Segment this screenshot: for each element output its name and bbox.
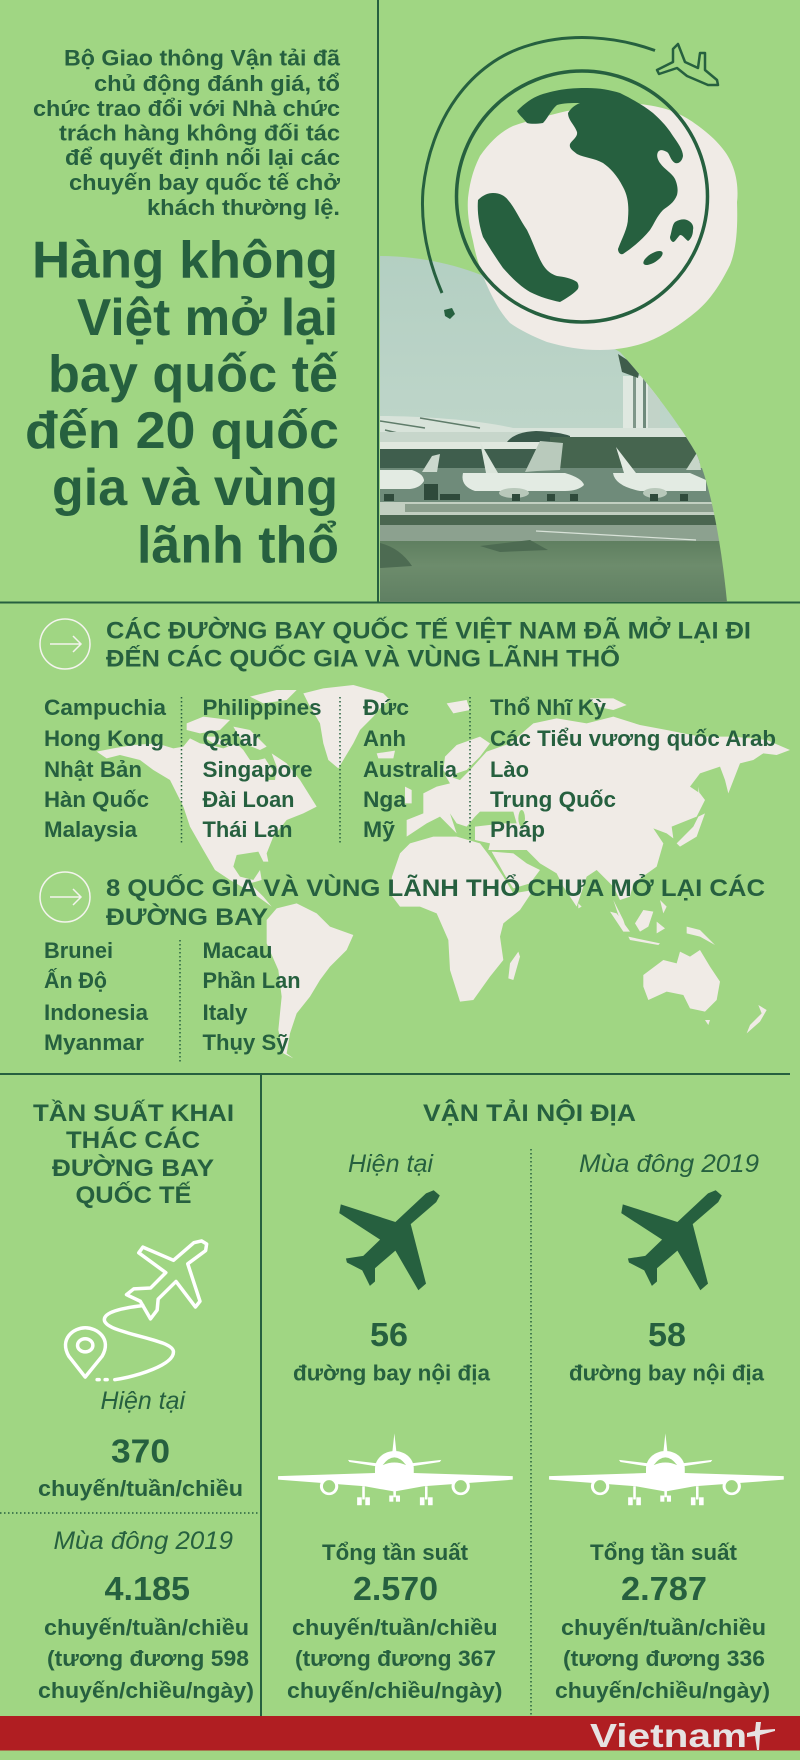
list: reopened countries: Thái Lan <box>202 817 292 842</box>
title: đến 20 quốc <box>25 402 339 460</box>
list: reopened countries: Philippines <box>202 695 322 720</box>
heading: reopened routes: ĐẾN CÁC QUỐC GIA VÀ VÙNG LÃNH THỔ <box>106 644 620 672</box>
list: not reopened countries: Ấn Độ <box>44 968 107 993</box>
title: bay quốc tế <box>48 346 338 404</box>
left: winter 2019 value <box>38 1527 254 1703</box>
left: winter 2019 value: chuyến/tuần/chiều <box>44 1615 249 1640</box>
heading: not reopened: ĐƯỜNG BAY <box>106 903 268 931</box>
orbit dot <box>444 308 455 319</box>
list: reopened countries: Hàn Quốc <box>44 787 149 812</box>
list: reopened countries: Malaysia <box>44 817 137 842</box>
heading: international frequency: ĐƯỜNG BAY <box>52 1154 214 1182</box>
domestic frequency: winter 2019: Tổng tần suất <box>590 1540 738 1565</box>
globe ring <box>456 71 708 322</box>
domestic frequency: current: Tổng tần suất <box>322 1540 469 1565</box>
logo: Vietnam+: Vietnam <box>590 1717 747 1754</box>
world map <box>97 685 790 1058</box>
list: reopened countries: Pháp <box>490 817 545 842</box>
list: reopened countries: Campuchia <box>44 695 166 720</box>
list: not reopened countries: Italy <box>202 1000 248 1025</box>
domestic frequency: winter 2019: chuyến/tuần/chiều <box>561 1615 766 1640</box>
intro text: khách thường lệ. <box>147 195 340 220</box>
list: reopened countries: Australia <box>363 757 457 782</box>
icon: small airplane outline <box>657 44 718 85</box>
domestic: winter 2019: Mùa đông 2019 <box>579 1150 759 1178</box>
intro text <box>33 46 340 220</box>
domestic frequency: winter 2019 <box>555 1540 770 1703</box>
list: reopened countries: Singapore <box>202 757 312 782</box>
title: Việt mở lại <box>77 289 338 347</box>
orbit arc <box>422 38 655 293</box>
intro text: Bộ Giao thông Vận tải đã <box>64 46 340 71</box>
left: current value: chuyến/tuần/chiều <box>38 1476 243 1501</box>
footer band <box>0 1716 800 1750</box>
list: not reopened countries: Macau <box>202 938 272 963</box>
heading: not reopened: 8 QUỐC GIA VÀ VÙNG LÃNH THỔ CHƯA MỞ LẠI CÁC <box>106 873 765 902</box>
heading: domestic transport: VẬN TẢI NỘI ĐỊA <box>423 1098 636 1127</box>
heading: reopened routes <box>106 616 751 672</box>
heading: international frequency: QUỐC TẾ <box>76 1181 192 1209</box>
list: not reopened countries <box>44 938 300 1055</box>
intro text: chức trao đổi với Nhà chức <box>33 96 340 121</box>
airport photo <box>380 250 730 603</box>
list: reopened countries: Lào <box>490 757 529 782</box>
domestic: current <box>293 1150 491 1386</box>
globe continents <box>478 88 693 302</box>
list: reopened countries: Nhật Bản <box>44 757 142 782</box>
domestic frequency: current: 2.570 <box>353 1570 438 1607</box>
list: reopened countries: Đức <box>363 695 409 720</box>
heading: not reopened <box>106 873 765 931</box>
left: winter 2019 value: (tương đương 598 <box>47 1646 249 1671</box>
list: reopened countries: Trung Quốc <box>490 787 616 812</box>
list: not reopened countries: Indonesia <box>44 1000 148 1025</box>
list: reopened countries <box>44 695 776 842</box>
domestic frequency: winter 2019: (tương đương 336 <box>563 1646 765 1671</box>
heading: international frequency: THÁC CÁC <box>66 1126 200 1154</box>
title: lãnh thổ <box>137 516 339 574</box>
heading: international frequency: TẦN SUẤT KHAI <box>33 1099 234 1127</box>
left: current value: Hiện tại <box>100 1387 186 1415</box>
domestic frequency: winter 2019: chuyến/chiều/ngày) <box>555 1678 770 1703</box>
icon: route with airplane and pin <box>66 1241 207 1380</box>
domestic frequency: winter 2019: 2.787 <box>621 1570 707 1607</box>
icon: white front plane 2 <box>549 1433 784 1505</box>
left: winter 2019 value: chuyến/chiều/ngày) <box>38 1678 254 1703</box>
intro text: trách hàng không đối tác <box>59 121 340 146</box>
domestic frequency: current <box>287 1540 502 1703</box>
list: reopened countries: Nga <box>363 787 406 812</box>
list: reopened countries: Mỹ <box>363 817 395 842</box>
title: gia và vùng <box>52 459 338 517</box>
left: current value <box>38 1387 243 1501</box>
left: current value: 370 <box>111 1432 170 1470</box>
planes <box>380 441 706 498</box>
domestic: winter 2019: đường bay nội địa <box>569 1360 765 1386</box>
icon: white front plane 1 <box>278 1433 513 1505</box>
logo: Vietnam+ <box>590 1717 775 1754</box>
title <box>25 232 339 574</box>
intro text: chủ động đánh giá, tổ <box>94 71 340 96</box>
globe blob <box>468 103 738 350</box>
list: not reopened countries: Phần Lan <box>202 968 300 993</box>
domestic frequency: current: (tương đương 367 <box>295 1646 496 1671</box>
list: not reopened countries: Brunei <box>44 938 113 963</box>
list: not reopened countries: Thụy Sỹ <box>202 1030 289 1055</box>
list: reopened countries: Anh <box>363 726 406 751</box>
intro text: chuyến bay quốc tế chở <box>69 170 340 195</box>
domestic: current: đường bay nội địa <box>293 1360 491 1386</box>
list: reopened countries: Thổ Nhĩ Kỳ <box>490 695 606 720</box>
intro text: để quyết định nối lại các <box>65 145 340 170</box>
list: not reopened countries: Myanmar <box>44 1030 144 1055</box>
left: winter 2019 value: 4.185 <box>104 1570 190 1607</box>
left: winter 2019 value: Mùa đông 2019 <box>54 1527 233 1555</box>
domestic: current: 56 <box>370 1316 408 1353</box>
list: reopened countries: Hong Kong <box>44 726 164 751</box>
icon: arrow circle 1 <box>40 619 90 669</box>
list: reopened countries: Qatar <box>202 726 261 751</box>
heading: reopened routes: CÁC ĐƯỜNG BAY QUỐC TẾ VIỆT NAM ĐÃ MỞ LẠI ĐI <box>106 616 751 644</box>
domestic: winter 2019 <box>569 1150 765 1386</box>
title: Hàng không <box>32 232 338 290</box>
list: reopened countries: Các Tiểu vương quốc Arab <box>490 726 776 751</box>
icon: arrow circle 2 <box>40 872 90 922</box>
domestic: winter 2019: 58 <box>648 1316 686 1353</box>
domestic frequency: current: chuyến/chiều/ngày) <box>287 1678 502 1703</box>
domestic frequency: current: chuyến/tuần/chiều <box>292 1615 498 1640</box>
heading: international frequency <box>33 1099 234 1209</box>
domestic: current: Hiện tại <box>348 1150 434 1178</box>
list: reopened countries: Đài Loan <box>202 787 294 812</box>
